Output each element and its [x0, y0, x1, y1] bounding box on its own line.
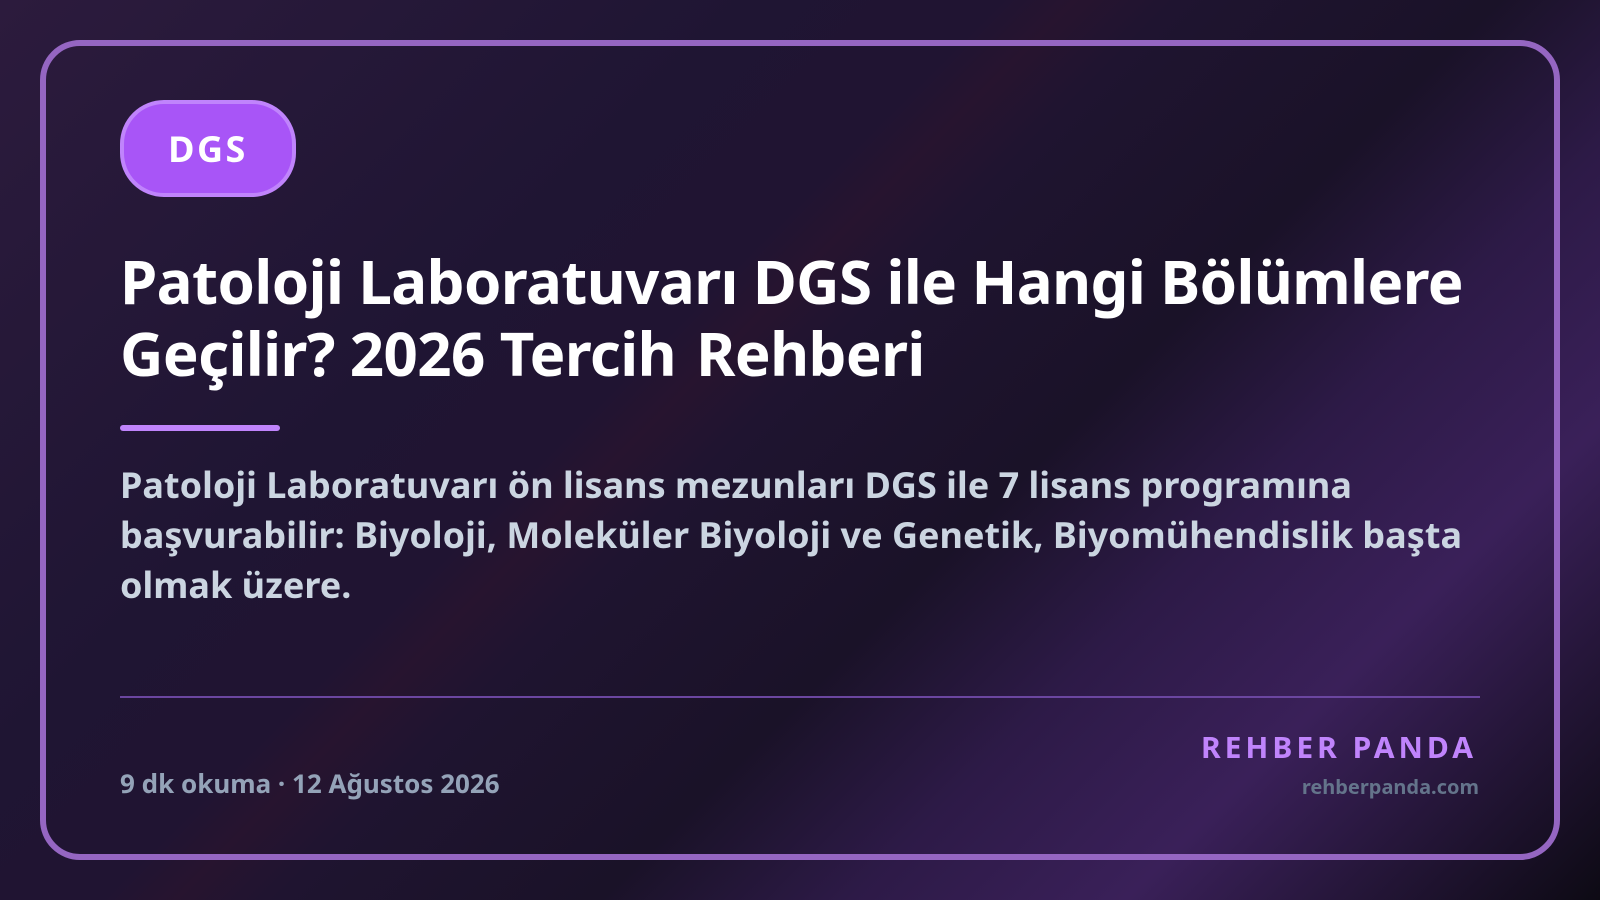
- brand name: REHBER PANDA: [1201, 726, 1477, 767]
- brand url: rehberpanda.com: [1302, 773, 1479, 800]
- description: olmak üzere.: [120, 560, 351, 609]
- accent bar: [120, 425, 280, 431]
- title: [120, 240, 1463, 394]
- meta: reading time and date: 9 dk okuma · 12 Ağustos 2026: [120, 765, 500, 801]
- footer divider: [120, 696, 1480, 698]
- badge: DGS: DGS: [168, 124, 248, 173]
- description: başvurabilir: Biyoloji, Moleküler Biyoloji ve Genetik, Biyomühendislik başta: [120, 510, 1462, 559]
- description: [120, 460, 1462, 609]
- badge: DGS: [120, 100, 296, 197]
- title: Patoloji Laboratuvarı DGS ile Hangi Bölümlere: [120, 240, 1463, 322]
- description: Patoloji Laboratuvarı ön lisans mezunları DGS ile 7 lisans programına: [120, 460, 1352, 509]
- title: Geçilir? 2026 Tercih Rehberi: [120, 312, 925, 394]
